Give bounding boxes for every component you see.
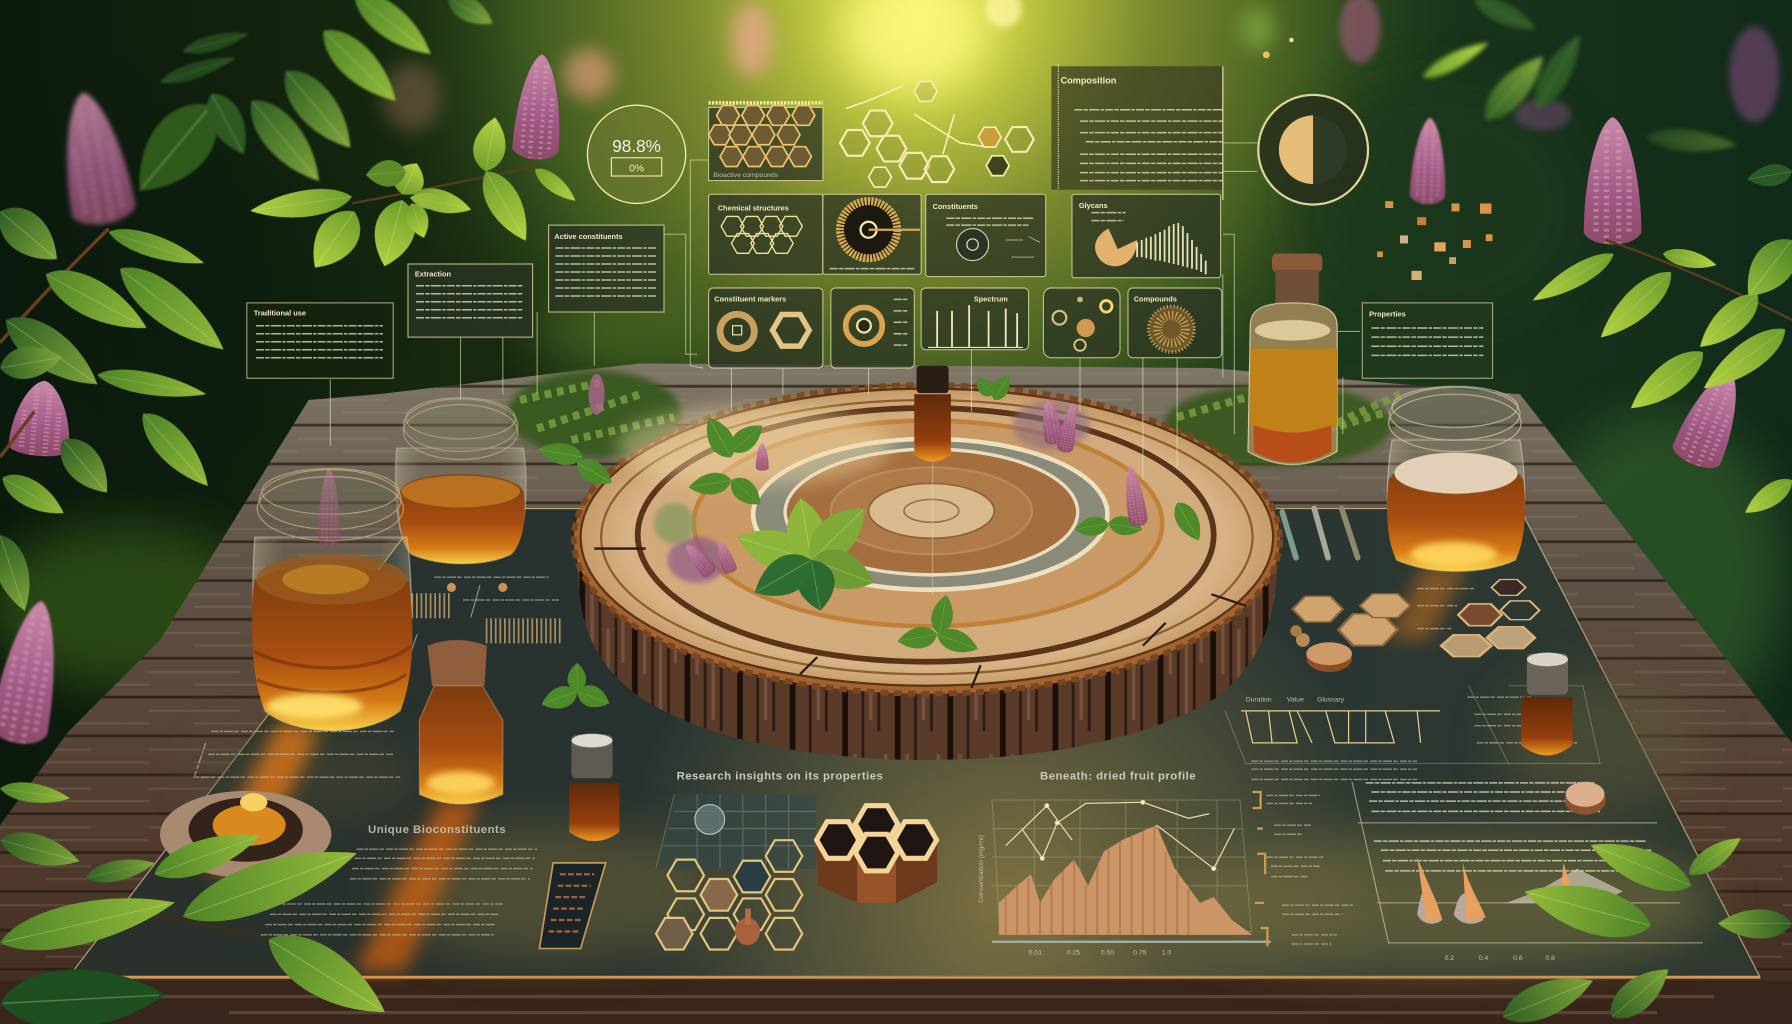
upper left mini charts	[409, 577, 561, 657]
hologram: middle text panel	[408, 264, 533, 337]
bottle: dark dropper	[569, 734, 619, 841]
hologram: middle text panel: Extraction	[415, 270, 452, 279]
hologram: nodes panel	[1043, 288, 1120, 358]
disc sunlight	[617, 406, 891, 486]
hologram: target panel	[831, 288, 914, 368]
hologram: hexagon chain panel	[709, 194, 823, 274]
floating amber particles	[1263, 38, 1493, 280]
hologram: report text panel	[1051, 64, 1223, 200]
hologram: far left text panel	[247, 303, 393, 378]
hologram: analysis panel	[926, 194, 1046, 277]
outlined hexagon set	[1441, 580, 1539, 657]
cork disc	[1565, 782, 1606, 815]
heading: chart title: Beneath: dried fruit profile	[1040, 770, 1196, 782]
jar: small back left	[396, 398, 526, 564]
icon: gourd	[735, 909, 760, 945]
frame lines	[1352, 782, 1703, 943]
hologram: left text panel	[549, 225, 664, 312]
gold hexagon samples	[1290, 580, 1539, 672]
hologram: far left text panel: Traditional use	[254, 308, 306, 317]
wood hexagon model	[816, 806, 937, 903]
icon: cut wood seal	[160, 791, 331, 878]
mat panel: left notes and seal	[160, 577, 606, 949]
honeycomb caption: Bioactive compounds	[713, 172, 779, 179]
hologram: percent dial	[587, 105, 686, 203]
herb clusters behind disc	[507, 370, 1400, 466]
pink flower spikes	[0, 53, 1754, 748]
bottle: cork top right	[1248, 254, 1337, 465]
leaves: bottom right foreground	[1496, 829, 1792, 1024]
bottle: right dropper	[1521, 653, 1573, 755]
orange light beams from the jars	[206, 566, 1469, 971]
glass vials	[1282, 509, 1358, 558]
x axis labels: 0.2 0.4 0.6 0.8	[1445, 955, 1555, 962]
hologram: right text panel: Properties	[1369, 310, 1406, 319]
purple flower patches	[667, 537, 727, 583]
dark research mat	[69, 509, 1760, 977]
disc bark	[574, 385, 1280, 760]
chart strip	[539, 863, 606, 949]
disc top face	[581, 389, 1273, 686]
text block: mat left notes	[194, 731, 537, 935]
hologram: molecule diagram	[840, 82, 1034, 187]
hologram: right text panel	[1362, 303, 1493, 378]
hologram: hexagon chain panel: Chemical structures	[718, 203, 789, 212]
leaves: left branch	[0, 196, 236, 616]
line chart	[1006, 800, 1234, 870]
grid map	[656, 794, 816, 869]
hologram: bar spectrum panel	[921, 288, 1029, 350]
frame lines	[1225, 686, 1600, 763]
mat panel: area and line chart	[978, 770, 1354, 956]
area chart	[999, 825, 1253, 935]
leaves: bright upper branch	[248, 115, 580, 279]
mat panel: hexagon research map	[656, 770, 883, 950]
leaves: top right branch	[1419, 0, 1738, 155]
x axis labels: 0.01 0.25 0.50 0.75 1.0	[1029, 949, 1171, 956]
hologram: ring icons panel: Constituent markers	[714, 295, 786, 304]
hologram: ring cross-section panel	[823, 194, 921, 274]
wood coin	[1306, 642, 1352, 672]
text block	[1366, 783, 1663, 871]
hologram: particle cloud panel	[1128, 288, 1222, 358]
y axis caption: Concentration (mg/ml)	[978, 835, 985, 903]
heading: mat left: Unique Bioconstituents	[368, 824, 506, 836]
mat panel: right notes and spike chart	[1352, 782, 1703, 962]
hex cells	[656, 840, 802, 950]
leaves: bottom left foreground	[0, 779, 398, 1024]
dial label: 0%	[629, 163, 644, 174]
report body	[1074, 110, 1223, 181]
disc cracks	[594, 549, 1246, 688]
hologram: bar spectrum panel: Spectrum	[974, 295, 1008, 304]
hologram: ring icons panel	[709, 288, 823, 368]
spike chart	[1417, 857, 1623, 924]
table notes	[1251, 697, 1577, 779]
hologram connector lines	[330, 143, 1360, 480]
herbs and flowers on the disc	[536, 371, 1208, 715]
bar table	[1241, 711, 1440, 743]
jar rim	[1389, 386, 1521, 451]
report heading: Composition	[1061, 75, 1117, 85]
jar: large front left	[252, 469, 412, 731]
central five-leaf sprig	[731, 494, 880, 614]
hologram: pie and bars panel	[1072, 194, 1221, 278]
column headings: Duration Value Glossary	[1246, 697, 1345, 704]
jar: large right	[1387, 386, 1525, 571]
growth rings	[601, 400, 1253, 674]
wooden table	[0, 363, 1792, 1024]
hologram: analysis panel: Constituents	[933, 202, 978, 211]
chart grid	[992, 800, 1251, 931]
leaves: right branch	[1527, 161, 1792, 522]
bottle: small cork	[419, 640, 503, 804]
hologram: left text panel: Active constituents	[554, 232, 623, 241]
hologram: particle cloud panel: Compounds	[1134, 295, 1177, 304]
center amber bottle	[914, 366, 951, 594]
hologram: honeycomb panel	[709, 103, 823, 181]
legend notes	[1253, 792, 1354, 946]
leaves: top left branch	[118, 0, 499, 210]
heading: research properties: Research insights on its properties	[677, 770, 883, 782]
jar rim	[257, 469, 403, 541]
area chart stripes	[1006, 826, 1189, 935]
cut tree disc	[574, 385, 1280, 760]
jar rim	[403, 398, 518, 459]
chart axis	[992, 941, 1271, 943]
flower seen through jar	[318, 469, 340, 546]
hologram: pie and bars panel: Glycans	[1079, 201, 1108, 210]
dial value: 98.8%	[612, 136, 661, 156]
mat panel: table grid	[1225, 686, 1600, 779]
hologram: pie dial	[1258, 95, 1368, 205]
